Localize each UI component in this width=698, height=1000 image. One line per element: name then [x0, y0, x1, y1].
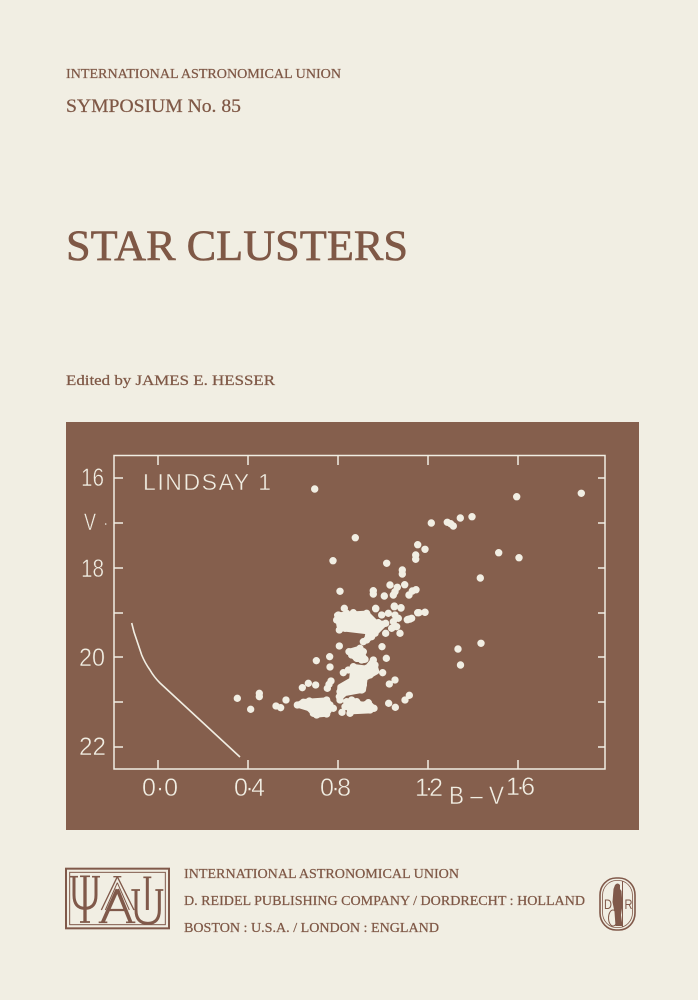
- panel: colour-magnitude diagram: [66, 422, 639, 830]
- publisher lines: BOSTON : U.S.A. / LONDON : ENGLAND: [184, 921, 439, 936]
- x axis labels: B – V: [449, 782, 504, 810]
- series label: INTERNATIONAL ASTRONOMICAL UNION: [66, 67, 341, 82]
- symposium number: SYMPOSIUM No. 85: [66, 97, 241, 117]
- reference curve: [132, 623, 240, 757]
- x axis labels: [142, 773, 535, 810]
- y axis labels: 20: [79, 644, 105, 672]
- logo: D. Reidel: [600, 878, 635, 930]
- x axis labels: 0·8: [320, 774, 351, 802]
- publisher lines: INTERNATIONAL ASTRONOMICAL UNION: [184, 867, 459, 882]
- y axis labels: 16: [81, 464, 104, 492]
- y axis labels: 18: [81, 555, 104, 583]
- scatter: main clusters: [237, 606, 425, 715]
- x axis labels: 1·2: [415, 774, 443, 802]
- logo: IAU: [66, 869, 169, 928]
- chart frame and ticks: [114, 456, 605, 769]
- logo: D. Reidel: D: [604, 896, 612, 912]
- y axis labels: V: [84, 509, 96, 536]
- chart label: Lindsay 1: LINDSAY 1: [143, 469, 271, 495]
- editor line: Edited by JAMES E. HESSER: [66, 373, 275, 389]
- title: STAR CLUSTERS: [66, 223, 408, 270]
- x axis labels: 1·6: [506, 773, 535, 801]
- scatter: isolated upper stars: [315, 489, 581, 665]
- publisher lines: [184, 867, 585, 936]
- x axis labels: 0·0: [142, 774, 178, 802]
- logo: D. Reidel: R: [624, 896, 632, 912]
- y axis labels: 22: [79, 733, 106, 761]
- publisher lines: D. REIDEL PUBLISHING COMPANY / DORDRECHT : HOLLAND: [184, 894, 585, 909]
- x axis labels: 0·4: [234, 774, 265, 802]
- y axis labels: [79, 464, 106, 761]
